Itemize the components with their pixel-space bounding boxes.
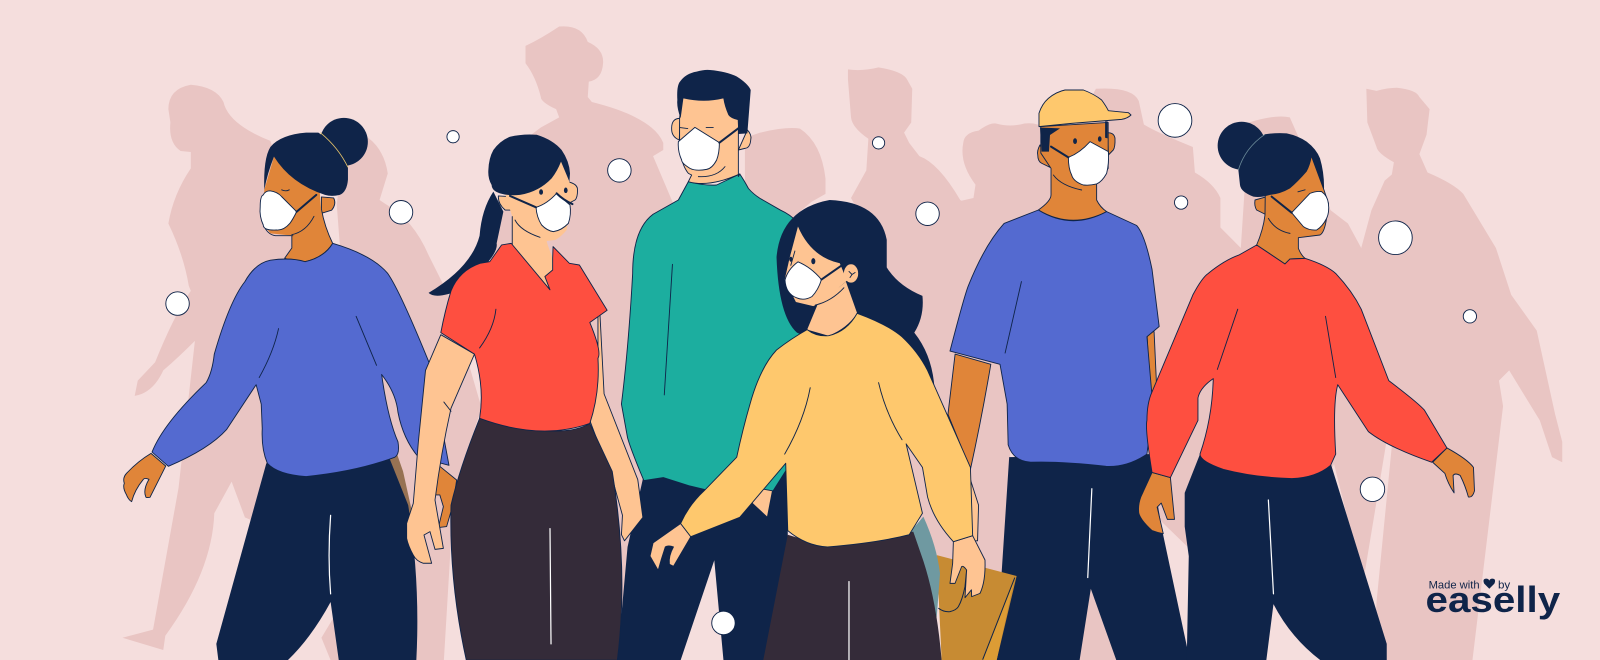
- particle: [166, 292, 189, 315]
- near ear: [498, 196, 513, 210]
- mask: [678, 127, 719, 170]
- neck: [807, 282, 857, 336]
- ear: [1255, 196, 1269, 215]
- eyes: [789, 257, 815, 264]
- left hand: [1139, 472, 1174, 534]
- logo tagline end: by: [1498, 579, 1511, 591]
- face: [785, 227, 847, 306]
- ear detail: [849, 271, 855, 278]
- silhouette: behind man in cap: [960, 89, 1367, 571]
- trouser crease: [848, 582, 850, 660]
- t-shirt: [950, 210, 1159, 466]
- silhouette: far left person: [122, 85, 306, 650]
- trouser crease: [1088, 489, 1092, 578]
- trousers: [216, 459, 417, 660]
- near ear: [321, 197, 335, 213]
- bag fold and handle: [938, 570, 1015, 660]
- trouser crease: [329, 515, 331, 594]
- neck line: [512, 217, 540, 245]
- silhouette: behind man in teal: [745, 128, 826, 219]
- mask strap: [719, 128, 738, 143]
- left ear: [1038, 145, 1050, 167]
- hair: [1238, 133, 1324, 197]
- side hair: [1040, 121, 1108, 152]
- hair back: [777, 200, 935, 408]
- particle: [1174, 196, 1188, 209]
- mask straps: [1051, 147, 1068, 157]
- mask: [536, 193, 570, 232]
- hair: [264, 133, 348, 196]
- near hand: [124, 453, 166, 502]
- particle: [1463, 310, 1477, 323]
- right hand: [950, 536, 985, 598]
- mask strap: [297, 195, 316, 212]
- person: woman in yellow sweater: [650, 200, 1017, 660]
- eyes: [539, 188, 568, 195]
- far arm peach: [969, 480, 979, 541]
- neck: [285, 209, 333, 262]
- mask: [260, 191, 297, 230]
- mask: [785, 262, 821, 299]
- face: [263, 157, 321, 236]
- icon: heart: [1484, 579, 1495, 589]
- particle: [447, 131, 459, 143]
- trousers: [996, 454, 1190, 660]
- hair tie: [320, 133, 348, 167]
- head and neck: [680, 98, 747, 184]
- bun: [1218, 122, 1266, 170]
- mask straps: [510, 193, 572, 207]
- near arm: [948, 354, 991, 469]
- neck and face: [505, 162, 571, 291]
- trousers: [1185, 454, 1387, 660]
- person: woman in red shirt: [407, 134, 643, 660]
- mask: [1068, 142, 1109, 185]
- person: man in teal sweater: [617, 70, 806, 660]
- bag strap: [911, 517, 940, 617]
- chin line: [1268, 190, 1305, 233]
- sweater creases: [259, 316, 377, 378]
- left ear: [672, 118, 680, 140]
- bun: [320, 118, 368, 166]
- hair tie: [1238, 134, 1265, 170]
- sweater crease: [664, 264, 672, 395]
- mask strap: [821, 265, 842, 280]
- particle: [608, 159, 631, 182]
- sweater: [621, 174, 806, 492]
- particle: [1360, 477, 1385, 502]
- particle: [712, 611, 735, 635]
- sweater creases: [1217, 309, 1336, 378]
- left hand: [650, 523, 691, 570]
- sweater creases: [785, 383, 902, 454]
- particle: [872, 137, 885, 149]
- bag: [937, 555, 1017, 660]
- mask: [1292, 191, 1329, 230]
- sweater: [152, 243, 449, 477]
- particle: [389, 201, 413, 224]
- sleeve crease: [480, 309, 496, 348]
- trousers: [763, 532, 942, 660]
- sweater: [681, 313, 973, 547]
- arm crease: [444, 402, 451, 411]
- silhouette: top centre person: [480, 26, 673, 660]
- hair: [488, 134, 570, 195]
- neck and face: [1257, 157, 1328, 264]
- particle: [916, 202, 939, 226]
- trouser crease: [550, 529, 551, 644]
- particle: [1158, 104, 1192, 137]
- ponytail: [429, 192, 503, 296]
- person: woman in red sweater: [1139, 122, 1474, 660]
- sleeve creases: [1005, 282, 1021, 353]
- right ear: [1108, 133, 1115, 155]
- silhouette: lower leg behind man in cap: [1078, 571, 1122, 660]
- chin line: [791, 251, 844, 305]
- near arm and hand: [407, 335, 474, 563]
- logo wordmark: easelly: [1426, 580, 1560, 620]
- mask strap: [1272, 197, 1292, 213]
- silhouette: far right person: [1327, 88, 1562, 660]
- particle: [1379, 221, 1412, 255]
- jaw line: [263, 190, 314, 236]
- bag side panel: [983, 580, 1014, 660]
- far arm: [1147, 332, 1157, 398]
- eyes: [1073, 136, 1102, 144]
- trousers: [617, 449, 788, 660]
- person: man in blue t-shirt with cap: [948, 90, 1190, 660]
- trousers: [451, 418, 622, 660]
- far ear: [567, 182, 578, 203]
- far hand: [433, 466, 457, 528]
- right ear: [738, 130, 751, 150]
- trouser crease: [1268, 500, 1273, 594]
- shirt: [441, 243, 607, 431]
- silhouette: behind first woman: [321, 128, 482, 660]
- silhouette: lower leg behind woman in red sweater: [1327, 434, 1388, 582]
- silhouette: centre right person: [848, 67, 1010, 577]
- pocket hand: [752, 489, 772, 517]
- chin line: [1053, 175, 1082, 190]
- cap: [1039, 90, 1131, 127]
- right hand: [1433, 448, 1474, 497]
- smile: [680, 128, 725, 177]
- sweater: [1146, 245, 1447, 479]
- neck and face: [1038, 122, 1108, 220]
- hair: [677, 70, 751, 134]
- far arm strip and hand: [389, 448, 413, 517]
- logo tagline: Made with: [1429, 579, 1480, 591]
- logo: Made with love by easelly: [1426, 579, 1560, 620]
- near ear: [844, 264, 858, 283]
- right arm: [590, 306, 643, 541]
- person: woman in blue sweater: [124, 118, 457, 660]
- floating particles: [166, 104, 1477, 635]
